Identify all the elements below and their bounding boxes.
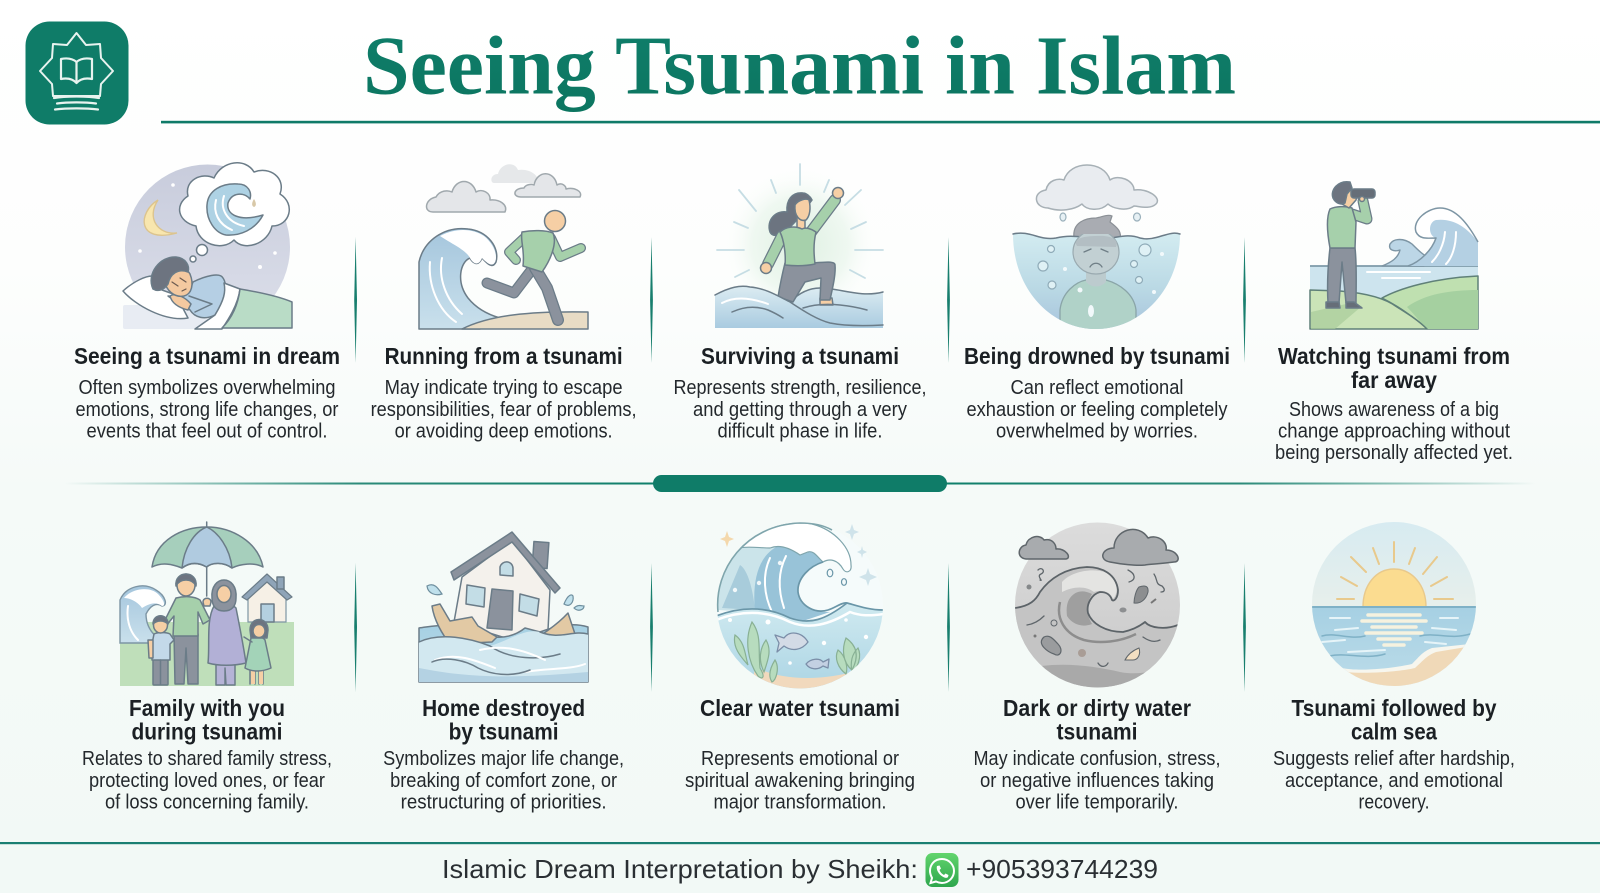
panel: being drowned by tsunami xyxy=(964,165,1230,442)
description: events that feel out of control. xyxy=(86,420,328,442)
footer rule xyxy=(0,842,1600,844)
description xyxy=(966,377,1228,442)
description: acceptance, and emotional xyxy=(1285,770,1503,792)
heading: Family with you xyxy=(129,695,285,721)
panel: family with you during tsunami xyxy=(82,522,332,814)
heading: Running from a tsunami xyxy=(385,343,623,369)
footer: contact line: Islamic Dream Interpretation by Sheikh: xyxy=(442,854,918,884)
description: and getting through a very xyxy=(693,399,908,421)
heading: far away xyxy=(1351,367,1437,393)
icon: sleeper dreaming of wave xyxy=(123,163,292,330)
description: restructuring of priorities. xyxy=(401,792,607,814)
description: or negative influences taking xyxy=(980,770,1214,792)
description: responsibilities, fear of problems, xyxy=(371,399,637,421)
heading xyxy=(1278,343,1510,393)
description: breaking of comfort zone, or xyxy=(390,770,617,792)
heading: Home destroyed xyxy=(422,695,585,721)
row separator with central pill xyxy=(64,475,1536,492)
description: May indicate trying to escape xyxy=(385,377,623,399)
description: Shows awareness of a big xyxy=(1289,399,1499,421)
icon: sun over calm sea xyxy=(1312,522,1476,700)
description xyxy=(82,748,332,814)
heading: Tsunami followed by xyxy=(1292,695,1497,721)
description xyxy=(1275,399,1513,464)
icon: clear wave with fish xyxy=(716,522,884,700)
description: Relates to shared family stress, xyxy=(82,748,332,770)
icon: tilted house in flood xyxy=(419,532,588,682)
heading: by tsunami xyxy=(449,718,559,744)
heading: Seeing a tsunami in dream xyxy=(74,343,340,369)
description: over life temporarily. xyxy=(1016,792,1178,814)
description: Can reflect emotional xyxy=(1010,377,1184,399)
description xyxy=(371,377,637,442)
heading: calm sea xyxy=(1351,718,1437,744)
icon: whatsapp xyxy=(926,853,958,887)
description: or avoiding deep emotions. xyxy=(395,420,613,442)
heading: tsunami xyxy=(1056,718,1138,744)
description: Often symbolizes overwhelming xyxy=(78,377,336,399)
icon: person under water with cloud xyxy=(1013,165,1180,340)
icon: family under umbrella xyxy=(120,522,294,686)
description: being personally affected yet. xyxy=(1275,442,1513,464)
icon: person running from wave xyxy=(419,164,588,329)
panel: home destroyed by tsunami xyxy=(383,532,624,814)
panel: clear water tsunami xyxy=(685,522,915,814)
description xyxy=(383,748,624,814)
heading: Being drowned by tsunami xyxy=(964,343,1230,369)
description: of loss concerning family. xyxy=(105,792,309,814)
icon: grey wave and storm clouds xyxy=(1015,522,1180,700)
heading xyxy=(422,695,585,744)
description xyxy=(76,377,339,442)
description: Represents strength, resilience, xyxy=(674,377,926,399)
description xyxy=(685,748,915,814)
panel: watching tsunami from far away xyxy=(1275,182,1513,464)
description: Suggests relief after hardship, xyxy=(1273,748,1515,770)
description: overwhelmed by worries. xyxy=(996,420,1198,442)
column dividers xyxy=(354,237,1246,692)
description: May indicate confusion, stress, xyxy=(974,748,1220,770)
description: difficult phase in life. xyxy=(718,420,882,442)
heading xyxy=(1003,695,1191,744)
footer: contact line xyxy=(442,853,1158,887)
header rule xyxy=(161,121,1600,123)
description: major transformation. xyxy=(714,792,886,814)
heading: Surviving a tsunami xyxy=(701,343,899,369)
description xyxy=(974,748,1220,814)
description: recovery. xyxy=(1358,792,1430,814)
heading xyxy=(129,695,285,744)
panel: seeing a tsunami in dream xyxy=(74,163,340,442)
description: spiritual awakening bringing xyxy=(685,770,915,792)
description: protecting loved ones, or fear xyxy=(89,770,325,792)
panel: surviving a tsunami xyxy=(674,164,926,442)
icon: woman rising from water xyxy=(715,164,883,328)
description: exhaustion or feeling completely xyxy=(966,399,1228,421)
phone number: +905393744239 xyxy=(966,854,1158,884)
icon: man with binoculars watching wave xyxy=(1310,182,1478,329)
heading: Dark or dirty water xyxy=(1003,695,1191,721)
description: change approaching without xyxy=(1278,420,1510,442)
panel: dark or dirty water tsunami xyxy=(974,522,1220,814)
heading: during tsunami xyxy=(132,718,282,744)
description: emotions, strong life changes, or xyxy=(76,399,339,421)
heading xyxy=(1292,695,1497,744)
description xyxy=(1273,748,1515,814)
description: Represents emotional or xyxy=(701,748,899,770)
description: Symbolizes major life change, xyxy=(383,748,624,770)
description xyxy=(674,377,926,442)
heading: Clear water tsunami xyxy=(700,695,900,721)
logo: book in star badge xyxy=(26,22,128,124)
heading: Watching tsunami from xyxy=(1278,343,1510,369)
title: Seeing Tsunami in Islam xyxy=(363,20,1236,112)
panel: running from a tsunami xyxy=(371,164,637,442)
panel: tsunami followed by calm sea xyxy=(1273,522,1515,814)
